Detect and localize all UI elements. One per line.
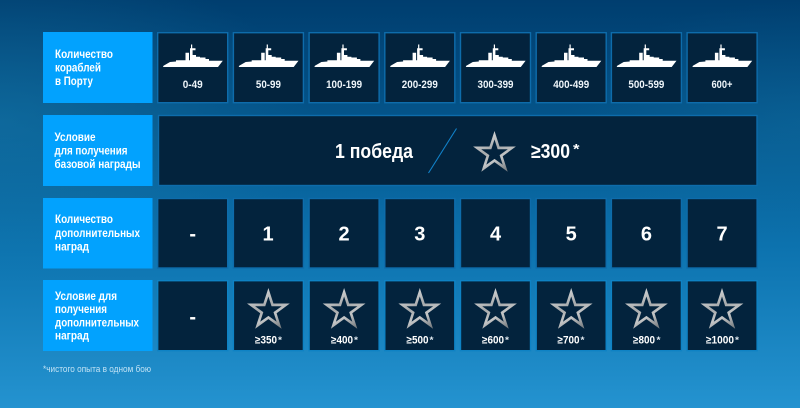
cell: 50-99 <box>233 33 303 103</box>
text: 300 threshold: ≥300 <box>531 141 570 163</box>
cell: none <box>158 281 228 351</box>
panel: base reward <box>158 116 757 186</box>
cell: 50-99: 50-99 <box>256 79 281 91</box>
cell: 400-499 <box>536 33 606 103</box>
cell: 350: * <box>278 335 283 345</box>
cell: 300-399 <box>460 33 530 103</box>
cell: 4: 4 <box>490 224 502 246</box>
cell: 3: 3 <box>414 224 425 246</box>
cell: 300-399: 300-399 <box>478 79 514 91</box>
label: additional reward condition <box>43 280 152 351</box>
cell: 1000: ≥1000 <box>706 334 734 346</box>
label: additional reward condition: наград <box>55 330 90 342</box>
cell: 500-599: 500-599 <box>628 79 664 91</box>
cell: 600: ≥600 <box>482 334 504 346</box>
cell: 0-49: 0-49 <box>183 79 203 91</box>
cell: 4 <box>460 198 530 268</box>
cell: 400 <box>309 281 379 351</box>
cell: 6 <box>611 198 681 268</box>
cell: 7: 7 <box>716 224 728 246</box>
label: base reward condition <box>43 115 152 186</box>
cell: none: - <box>189 224 196 246</box>
cell: 500: * <box>430 335 434 345</box>
cell: 200-299 <box>385 33 455 103</box>
cell: 5 <box>536 198 606 268</box>
text: one victory: 1 победа <box>335 141 414 163</box>
cell: 2: 2 <box>339 224 350 246</box>
cell: 400: ≥400 <box>331 334 353 346</box>
cell: 700: ≥700 <box>558 334 580 346</box>
footnote: *чистого опыта в одном бою <box>43 364 151 375</box>
cell: 800 <box>611 281 681 351</box>
cell: 500: ≥500 <box>406 334 428 346</box>
cell: 5: 5 <box>566 224 577 246</box>
row: additional reward count <box>43 198 757 268</box>
cell: 1: 1 <box>262 224 274 246</box>
cell: 800: * <box>656 335 661 345</box>
cell: 6: 6 <box>641 224 652 246</box>
row: ship count <box>43 32 757 103</box>
cell: 0-49 <box>158 33 228 103</box>
cell: 400-499: 400-499 <box>553 79 589 91</box>
label: additional reward count: наград <box>55 242 90 254</box>
cell: 350 <box>233 281 303 351</box>
cell: 700: * <box>580 335 585 345</box>
cell: none: - <box>189 306 196 328</box>
label: ship count: Количество <box>55 49 113 61</box>
row: additional reward condition <box>43 280 757 351</box>
label: additional reward condition: получения <box>55 304 107 316</box>
label: additional reward count <box>43 198 152 268</box>
label: additional reward count: Количество <box>55 214 113 226</box>
label: ship count: в Порту <box>55 76 94 88</box>
cell: 200-299: 200-299 <box>402 79 438 91</box>
label: base reward condition: для получения <box>54 146 128 158</box>
cell: 1 <box>233 198 303 268</box>
icon: star <box>473 131 516 172</box>
label: base reward condition: Условие <box>54 132 96 144</box>
label: ship count: кораблей <box>55 62 101 74</box>
cell: 500-599 <box>611 33 681 103</box>
cell: 100-199 <box>309 33 379 103</box>
cell: 2 <box>309 198 379 268</box>
cell: 1000: * <box>735 335 740 345</box>
cell: 800: ≥800 <box>633 334 655 346</box>
cell: 100-199: 100-199 <box>326 79 362 91</box>
asterisk: * <box>573 140 580 156</box>
cell: 600 <box>460 281 530 351</box>
cell: 700 <box>536 281 606 351</box>
row: base reward condition <box>43 115 757 186</box>
cell: none <box>158 198 228 268</box>
label: ship count <box>43 32 152 103</box>
cell: 400: * <box>354 335 359 345</box>
cell: 350: ≥350 <box>255 334 277 346</box>
slash divider <box>428 128 456 173</box>
cell: 3 <box>385 198 455 268</box>
label: additional reward condition: дополнительных <box>55 318 140 330</box>
label: additional reward count: дополнительных <box>55 228 141 240</box>
cell: 7 <box>687 198 757 268</box>
label: additional reward condition: Условие для <box>55 291 117 303</box>
cell: 500 <box>385 281 455 351</box>
cell: 600+: 600+ <box>712 79 732 91</box>
label: base reward condition: базовой награды <box>54 159 141 171</box>
cell: 600: * <box>505 335 510 345</box>
cell: 1000 <box>687 281 757 351</box>
cell: 600+ <box>687 33 757 103</box>
